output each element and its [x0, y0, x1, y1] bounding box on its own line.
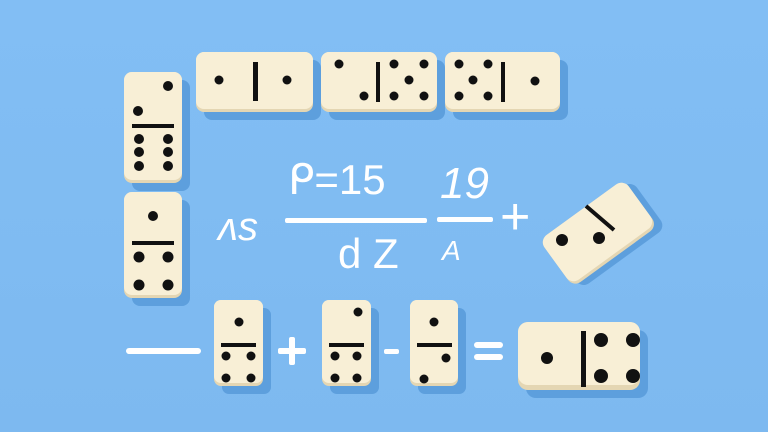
- minus bar left: [126, 348, 201, 354]
- formula text: ʌs: [216, 205, 258, 249]
- domino: top 3 (5|1): [445, 52, 568, 120]
- minus sign: [384, 349, 399, 354]
- formula text: d Z: [338, 230, 399, 277]
- domino: top 2 (2|5): [321, 52, 445, 120]
- plus sign: [278, 337, 306, 365]
- formula text: 19: [440, 159, 489, 208]
- formula text: A: [440, 235, 461, 266]
- domino: bottom 1 (1|4): [214, 300, 271, 394]
- domino: left vertical bottom (1|4): [124, 192, 190, 306]
- equals sign: [474, 342, 503, 360]
- formula text: +: [500, 188, 530, 246]
- domino: top 1 (1|1): [196, 52, 321, 120]
- domino: result (1|4): [518, 322, 648, 398]
- domino: left vertical top (1|6): [124, 72, 190, 191]
- equation line: bottom row: [126, 300, 648, 398]
- domino: bottom 2 (1|4): [322, 300, 379, 394]
- domino: bottom 3 (1|2): [410, 300, 466, 394]
- formula text: [216, 156, 530, 277]
- formula text: ᑭ=15: [288, 156, 386, 203]
- domino: tilted (2|0): [539, 176, 666, 292]
